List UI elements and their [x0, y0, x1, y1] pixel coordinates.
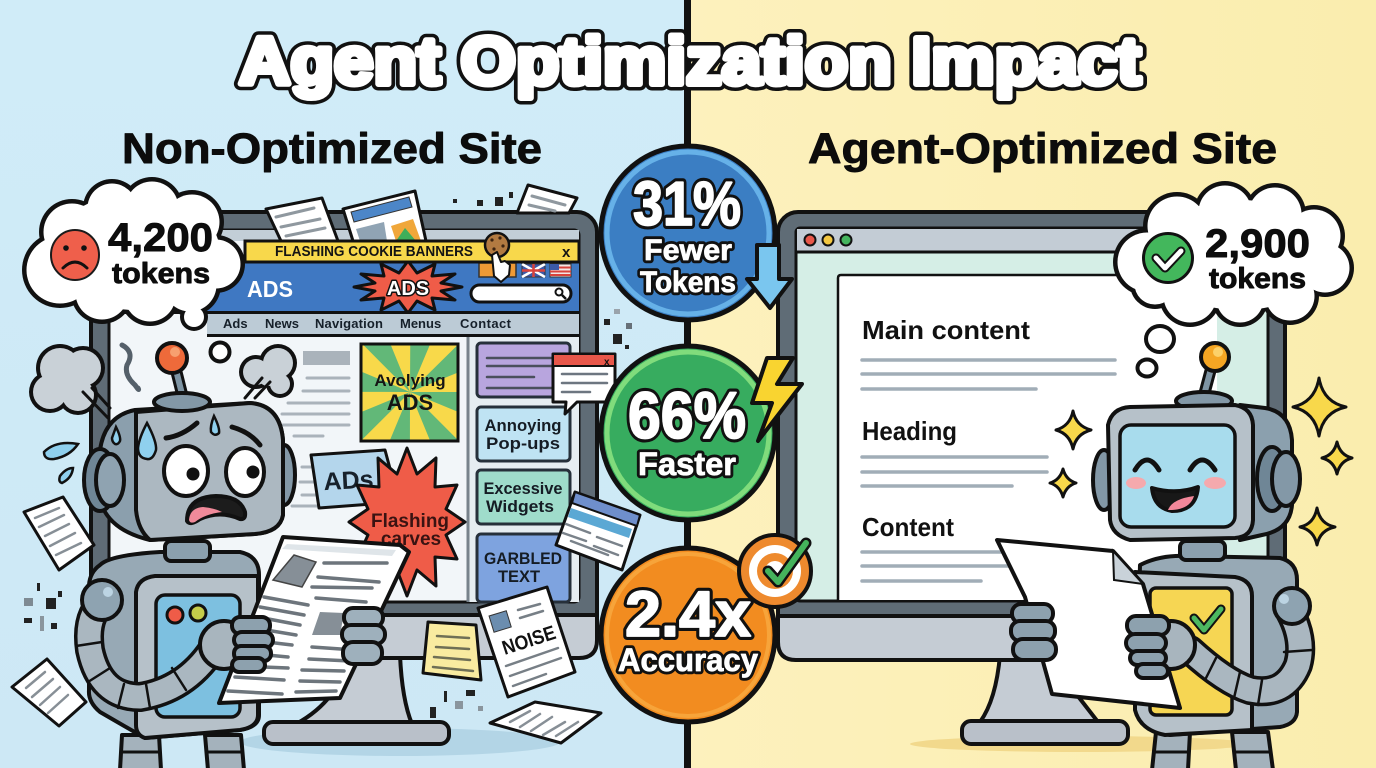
- yellow banner: flashing cookie banners: [245, 241, 579, 262]
- yellow chest screen: [1150, 588, 1232, 715]
- value: 31%: [633, 170, 741, 239]
- right ear: [1257, 447, 1300, 511]
- legs: [1152, 732, 1273, 768]
- antenna: [154, 343, 210, 411]
- torso: [89, 552, 259, 738]
- legs: [120, 735, 244, 768]
- article lines: [282, 351, 350, 506]
- widget: garbled text: GARBLED: [484, 549, 562, 568]
- widget: garbled text: TEXT: [498, 567, 541, 586]
- value: 31%: [633, 170, 741, 239]
- face screen: [1120, 425, 1235, 527]
- sparkles: [1050, 378, 1352, 545]
- ads burst: [354, 261, 462, 313]
- label: tokens: Tokens: [640, 266, 736, 299]
- sheet of paper: [997, 540, 1180, 708]
- hand left: [1011, 604, 1056, 660]
- left eye: [164, 446, 208, 496]
- ads sticker: ADs: [323, 466, 374, 496]
- steam puff left: [29, 344, 110, 418]
- text: tokens: tokens: [1209, 263, 1306, 295]
- thought bubble small: [1138, 360, 1156, 376]
- browser window: [796, 228, 1268, 601]
- smile: [1152, 487, 1198, 511]
- callout: 4,200 tokens: [22, 177, 245, 331]
- title: Agent Optimization Impact: [239, 24, 1141, 99]
- arm: [76, 580, 212, 708]
- stat: 2.4x accuracy: [601, 535, 811, 722]
- center divider: [684, 0, 691, 768]
- nav bar: Menus: [400, 316, 441, 331]
- yellow banner: flashing cookie banners: x: [562, 244, 571, 261]
- widget: garbled text: [477, 534, 570, 602]
- robot: happy: [997, 343, 1352, 768]
- icon: down arrow: [747, 245, 792, 308]
- sweat drops: [44, 416, 219, 483]
- label: accuracy: Accuracy: [618, 642, 758, 678]
- icon: cookie: [485, 233, 509, 257]
- right eye: [226, 448, 264, 496]
- head: [44, 403, 295, 540]
- nav bar: Navigation: [315, 316, 383, 331]
- purple widget: [477, 343, 570, 397]
- hand right: [1126, 616, 1195, 678]
- left ear: [1093, 450, 1115, 510]
- back of head: [1240, 405, 1292, 540]
- nav bar: [207, 314, 579, 337]
- web page card poking out top: [343, 191, 426, 241]
- page header: ads banner: [109, 261, 579, 314]
- browser title bar: [797, 229, 1267, 252]
- ad box: avolying ads: ADS: [387, 390, 433, 415]
- text: 4,200: 4,200: [108, 216, 213, 260]
- widget: excessive widgets: Excessive: [484, 479, 562, 498]
- stat: 31% fewer tokens: [601, 146, 792, 320]
- steam puff right: [239, 344, 297, 398]
- thought bubble dot: [210, 342, 230, 362]
- title: Agent Optimization Impact: [239, 24, 1141, 99]
- monitor frame: [778, 212, 1285, 660]
- paper poking out top 2: [517, 185, 577, 213]
- text: heading: Heading: [862, 416, 957, 446]
- hand right: [342, 608, 385, 664]
- pop-up window: [553, 354, 615, 414]
- thought bubble large: [1146, 326, 1174, 352]
- ads burst: ADS: [387, 278, 429, 300]
- ads sticker: [311, 450, 399, 508]
- content lines: [862, 360, 1115, 389]
- heading: non-optimized site: Non-Optimized Site: [122, 125, 542, 173]
- chest lights: [167, 607, 183, 623]
- label: accuracy: Accuracy: [618, 642, 758, 678]
- label: faster: Faster: [638, 446, 736, 482]
- widget: annoying pop-ups: Annoying: [484, 416, 562, 435]
- stat: 66% faster: [601, 346, 802, 520]
- icon: lightning bolt: [752, 358, 802, 441]
- label: faster: Faster: [638, 446, 736, 482]
- search box: [471, 285, 571, 302]
- value: 66%: [628, 378, 746, 452]
- arm: [1190, 588, 1312, 705]
- nav bar: News: [265, 316, 299, 331]
- label: fewer: Fewer: [644, 234, 732, 267]
- widget: excessive widgets: [477, 470, 570, 524]
- value: 2.4x: [625, 578, 751, 650]
- icon: us flag: [550, 264, 571, 277]
- nav bar: Contact: [460, 316, 512, 331]
- flashing burst: carves: [381, 529, 441, 550]
- monitor screen: [109, 230, 579, 602]
- flashing burst: [349, 448, 465, 596]
- yellow banner: flashing cookie banners: FLASHING COOKIE BANNERS: [275, 244, 473, 260]
- text: tokens: tokens: [112, 258, 210, 290]
- neck: [1180, 541, 1225, 560]
- window buttons: [804, 234, 852, 246]
- callout: 2,900 tokens: [1113, 181, 1354, 376]
- content lines lower: [862, 552, 1012, 581]
- right ear: [273, 445, 295, 505]
- robot: stressed: [29, 342, 409, 768]
- worried brows: [166, 423, 260, 445]
- shadow under monitor: [240, 728, 560, 756]
- pixel noise debris: [24, 192, 632, 718]
- sticky note: [423, 622, 481, 680]
- antenna: [1176, 343, 1232, 410]
- ad box: avolying ads: [361, 344, 458, 441]
- panel: optimized monitor: [778, 212, 1285, 752]
- floating paper bottom right: [490, 702, 601, 743]
- icon: green check: [1144, 234, 1192, 282]
- face frame: [1108, 405, 1253, 540]
- icon: target with check: [739, 535, 811, 607]
- happy eyes: [1135, 460, 1215, 470]
- label: tokens: Tokens: [640, 266, 736, 299]
- left ear: [84, 449, 124, 511]
- icon: hand cursor: [492, 252, 510, 282]
- paper poking out top 1: [266, 198, 338, 241]
- head shape: [100, 403, 283, 540]
- head: [1093, 405, 1300, 540]
- label: fewer: Fewer: [644, 234, 732, 267]
- floating noise paper: [478, 587, 575, 697]
- torso: [1135, 556, 1297, 735]
- value: 2.4x: [625, 578, 751, 650]
- wiggly smoke: [122, 345, 139, 389]
- pop-up window: x: [604, 357, 610, 368]
- floating noise paper: NOISE: [500, 622, 559, 660]
- nav bar: Ads: [223, 316, 248, 331]
- logo text: ads: ADS: [247, 276, 293, 302]
- cheeks: [1126, 477, 1226, 489]
- flashing burst: Flashing: [371, 511, 449, 532]
- neck: [165, 541, 210, 561]
- icon: uk flag: [522, 264, 545, 277]
- text: 2,900: 2,900: [1205, 222, 1310, 266]
- monitor stand: [264, 655, 449, 744]
- panel: left background: [0, 0, 688, 768]
- orange button: [479, 263, 516, 277]
- panel: right background: [688, 0, 1376, 768]
- heading lines: [862, 457, 1047, 486]
- shadow under monitor: [910, 736, 1250, 752]
- widget: excessive widgets: Widgets: [486, 497, 554, 516]
- floating paper upper left: [24, 497, 94, 570]
- sidebar: [361, 337, 579, 602]
- floating browser window: [556, 492, 640, 570]
- widget: annoying pop-ups: [477, 407, 570, 461]
- monitor stand: [962, 655, 1128, 744]
- text: main content: Main content: [862, 315, 1030, 345]
- chest screen: [156, 595, 240, 717]
- heading: agent-optimized site: Agent-Optimized Site: [808, 125, 1277, 173]
- main content card: [838, 275, 1217, 600]
- icon: chest check: [1194, 609, 1221, 630]
- newspaper: [219, 537, 409, 703]
- open mouth: [187, 496, 245, 523]
- hand left: [200, 617, 273, 672]
- floating paper lower left: [12, 659, 86, 726]
- monitor frame: [91, 212, 597, 658]
- widget: annoying pop-ups: Pop-ups: [486, 434, 560, 453]
- ad box: avolying ads: Avolying: [374, 371, 446, 390]
- panel: non-optimized monitor and clutter: [12, 185, 632, 756]
- icon: sad face: [51, 230, 99, 280]
- value: 66%: [628, 378, 746, 452]
- text: content: Content: [862, 512, 954, 542]
